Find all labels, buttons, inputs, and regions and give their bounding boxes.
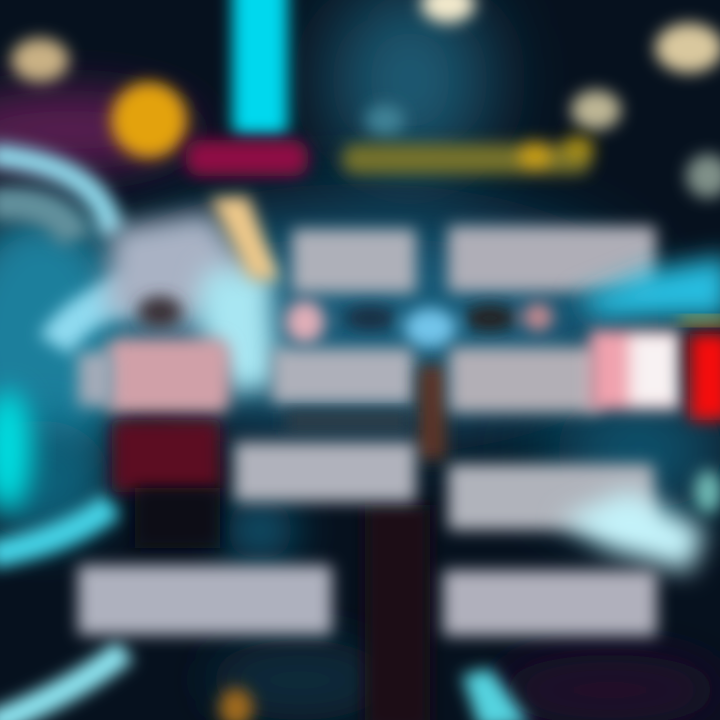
panel: row 3 centre	[234, 442, 416, 502]
divider glints	[285, 300, 553, 348]
icon: yellow circle	[111, 82, 187, 158]
light figure glow	[195, 196, 280, 395]
left cyan arcs	[0, 155, 135, 720]
panel: row 3 right	[448, 464, 654, 530]
panel: row 2 centre	[272, 348, 414, 404]
dark band between rows	[285, 412, 410, 430]
figure: left person	[106, 296, 230, 548]
right colour block: white and pink	[590, 330, 680, 410]
ceiling lights	[11, 0, 720, 198]
left cyan glow	[0, 390, 32, 510]
heading: gold segment	[342, 136, 594, 174]
yellow accent line	[680, 317, 720, 324]
light cyan glow, lower right	[560, 490, 705, 572]
panel: row 1 right	[448, 226, 656, 292]
right colour block: cyan	[575, 255, 720, 318]
panel: row 4 right	[443, 570, 657, 636]
icon: cyan light beam	[232, 0, 288, 135]
heading: magenta segment	[186, 140, 308, 176]
right colour block: red	[690, 334, 720, 420]
panel: row 4 left	[78, 565, 332, 635]
panel: row 2 right	[449, 347, 599, 413]
panel: row 1 centre	[292, 229, 416, 293]
figure: right person	[365, 365, 446, 720]
panel: upper-left card	[105, 212, 262, 325]
bottom orange glow	[219, 688, 253, 720]
panel: row 2 left edge	[78, 352, 114, 406]
lower right green-cyan glint	[694, 470, 720, 514]
bottom cyan streak	[462, 668, 530, 720]
